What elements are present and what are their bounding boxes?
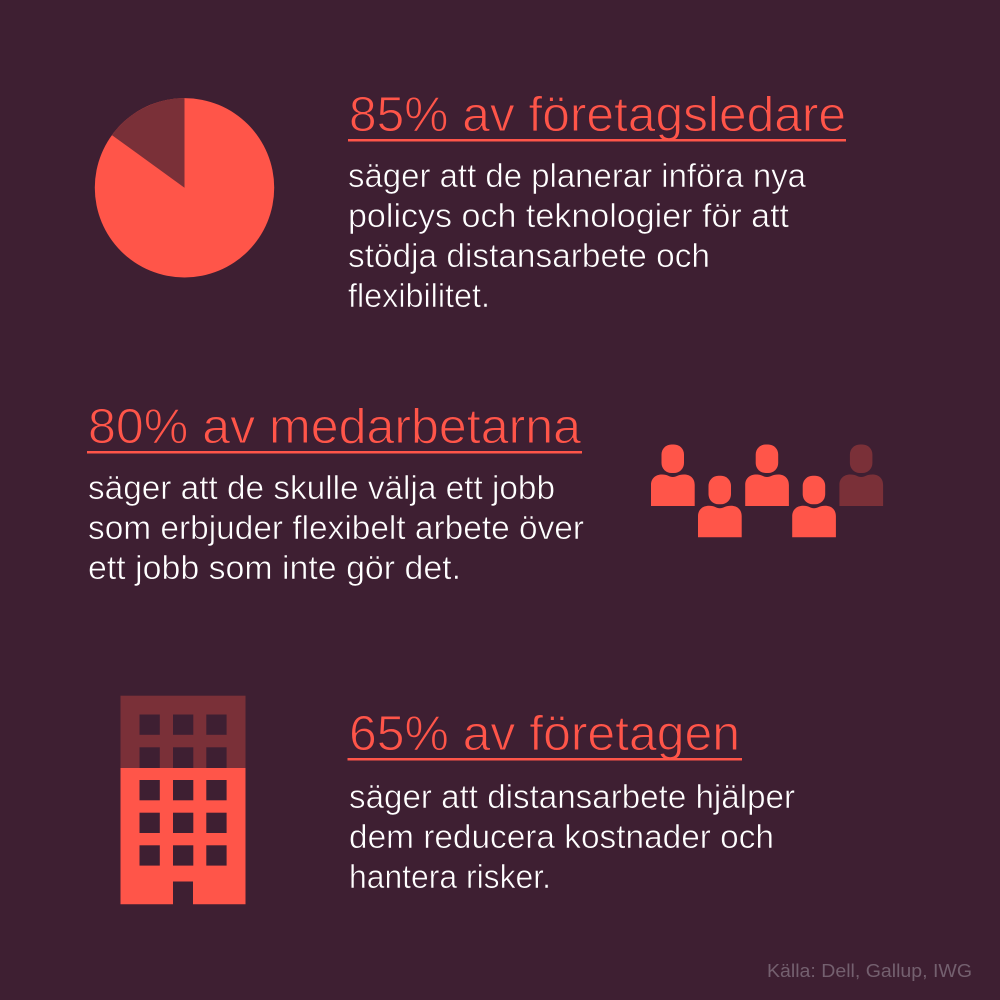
text block: companies description: hantera risker. bbox=[349, 858, 551, 895]
text block: companies description bbox=[349, 778, 795, 895]
text block: leaders description: policys och teknologier för att bbox=[348, 197, 789, 234]
text block: companies description: dem reducera kostnader och bbox=[349, 818, 774, 855]
panel: 65% of companies bbox=[120, 696, 795, 904]
text block: employees description: säger att de skulle välja ett jobb bbox=[88, 469, 555, 506]
text block: leaders description bbox=[348, 157, 807, 314]
text block: employees description: som erbjuder flexibelt arbete över bbox=[88, 509, 584, 546]
text block: employees description: ett jobb som inte gör det. bbox=[88, 549, 461, 586]
text block: employees description bbox=[88, 469, 584, 586]
text block: leaders description: stödja distansarbete och bbox=[348, 237, 710, 274]
icon: building 65% filled bbox=[120, 696, 246, 904]
icon: pie chart 85% bbox=[95, 98, 274, 277]
heading: 85% av företagsledare: 85% av företagsledare bbox=[349, 88, 846, 142]
heading: 80% av medarbetarna: 80% av medarbetarna bbox=[88, 400, 582, 454]
text block: leaders description: säger att de planerar införa nya bbox=[348, 157, 807, 194]
heading: 65% av företagen: 65% av företagen bbox=[349, 707, 740, 761]
panel: 85% of business leaders bbox=[95, 88, 846, 314]
source note: Källa: Dell, Gallup, IWG bbox=[767, 961, 972, 981]
text block: leaders description: flexibilitet. bbox=[348, 277, 490, 314]
text block: companies description: säger att distansarbete hjälper bbox=[349, 778, 795, 815]
panel: 80% of employees bbox=[87, 400, 883, 586]
icon: five people, four highlighted bbox=[651, 444, 883, 537]
